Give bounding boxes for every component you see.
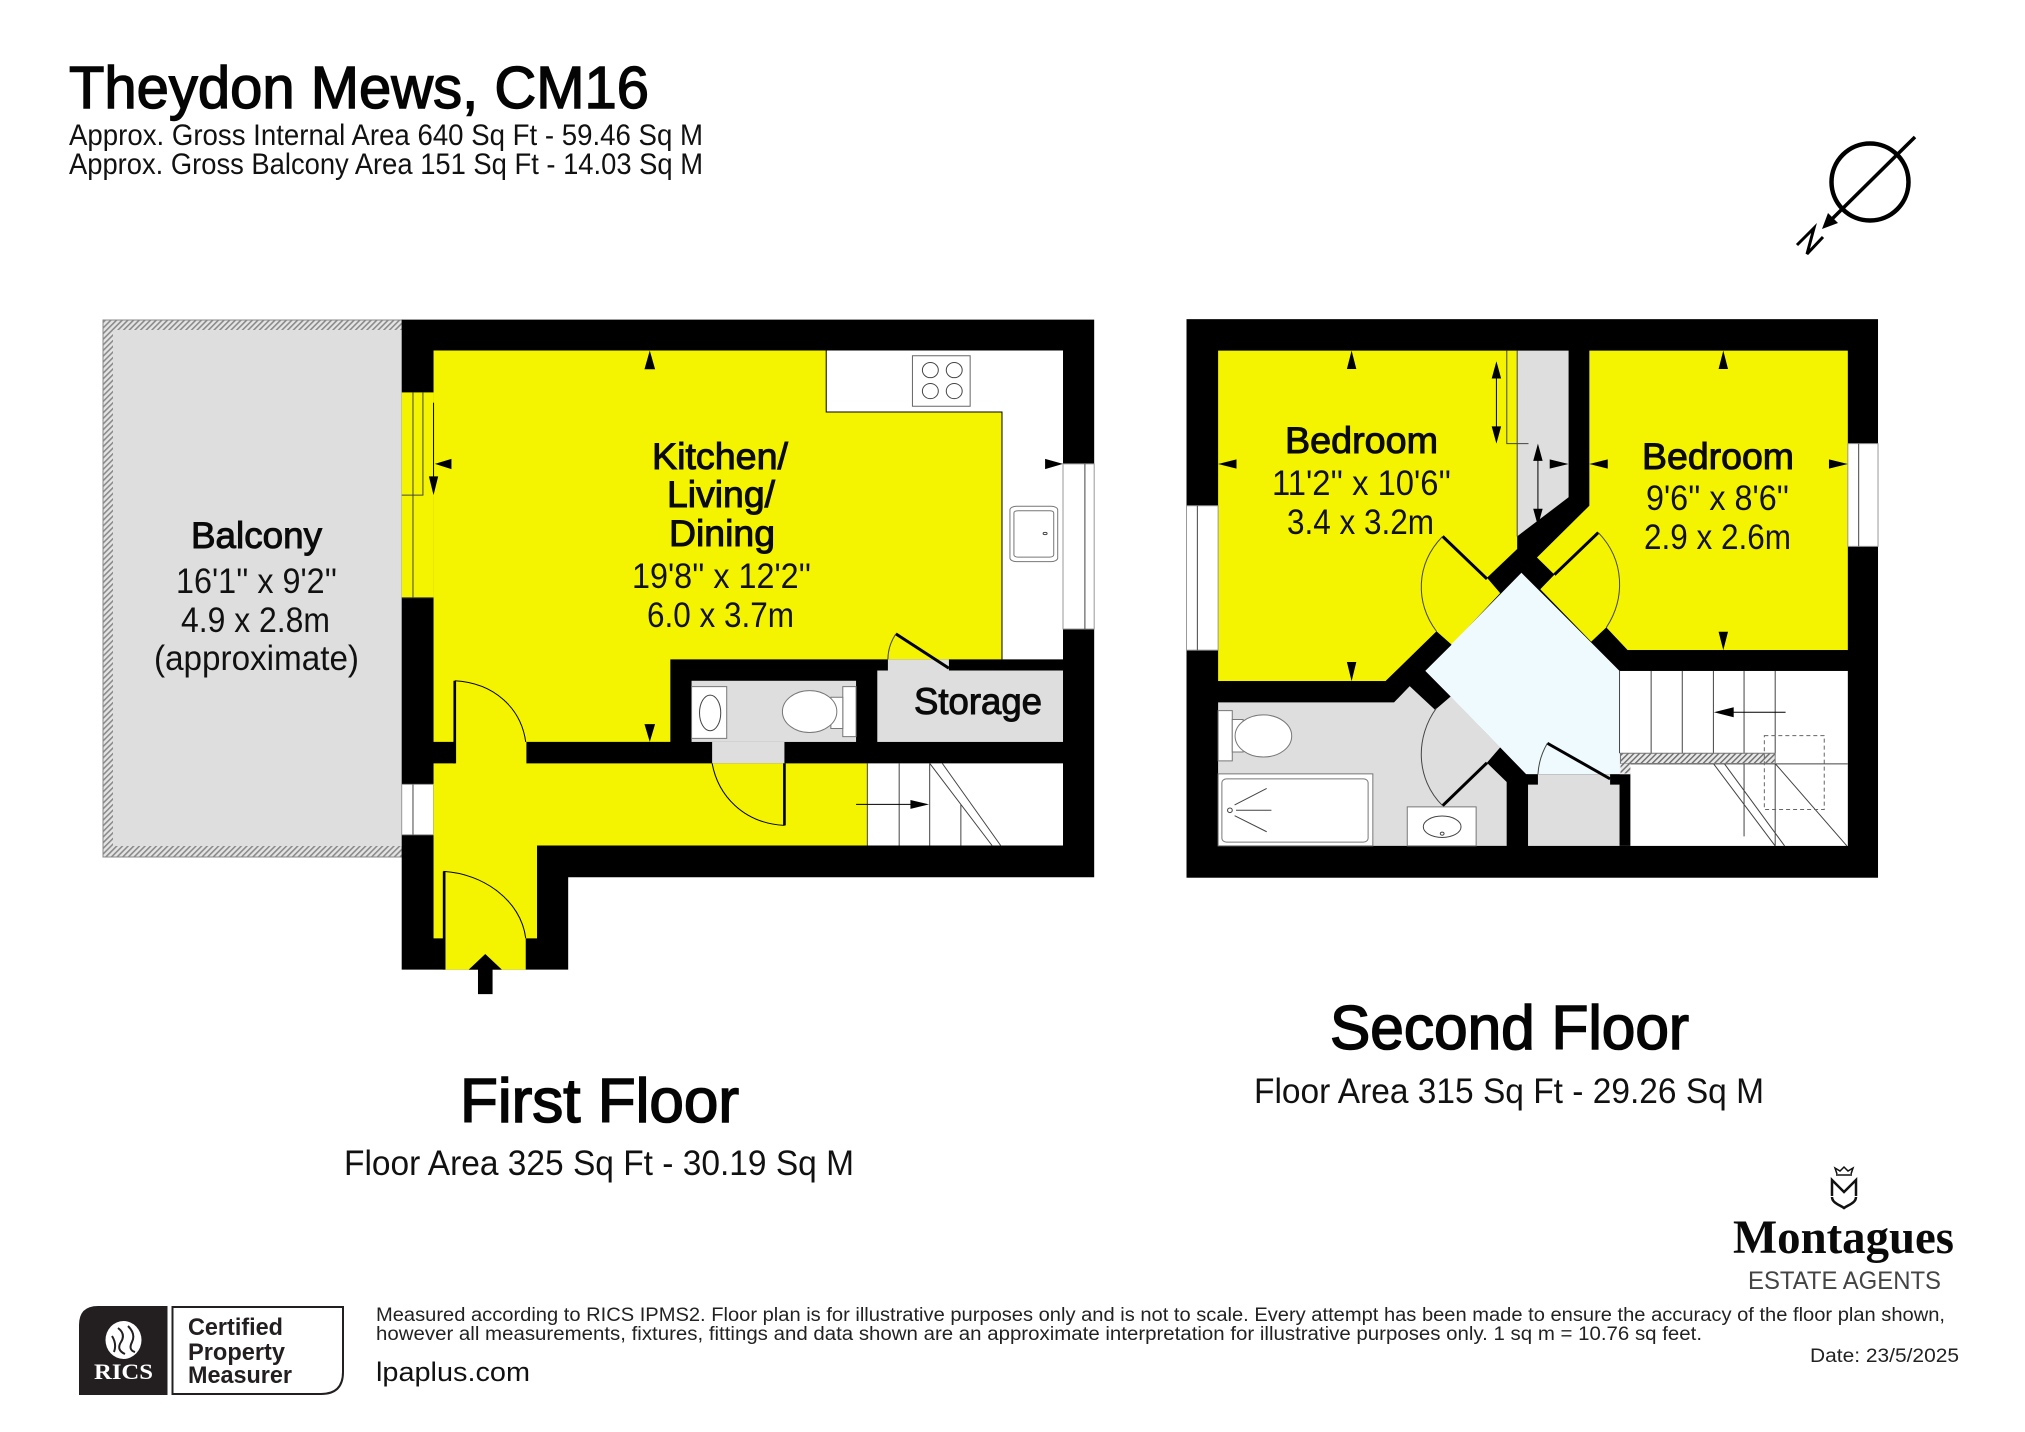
icon: Montagues crest bbox=[1832, 1167, 1856, 1208]
bedroom one label: Bedroom bbox=[1285, 420, 1438, 461]
stairs up bbox=[1620, 671, 1848, 846]
icon: entrance arrow bbox=[469, 954, 502, 994]
logo: Montagues estate agents: Montagues bbox=[1733, 1211, 1954, 1264]
bedroom one label: 11'2'' x 10'6'' bbox=[1272, 464, 1451, 503]
lower walls bbox=[1218, 628, 1848, 846]
internal area text: Approx. Gross Internal Area 640 Sq Ft - 59.46 Sq M bbox=[69, 119, 703, 152]
room dimension arrows bbox=[644, 350, 1063, 742]
second floor heading: Second Floor bbox=[1330, 994, 1689, 1063]
hallway bbox=[434, 763, 867, 970]
icon: kitchen sink bbox=[1010, 506, 1058, 562]
wardrobe bbox=[1517, 351, 1569, 536]
icon: north compass bbox=[1797, 137, 1915, 254]
kitchen label: 6.0 x 3.7m bbox=[647, 596, 794, 635]
first floor plan bbox=[103, 320, 1094, 994]
logo: Montagues estate agents bbox=[1733, 1167, 1954, 1295]
balcony sliding door bbox=[402, 392, 451, 598]
first floor heading bbox=[344, 1067, 854, 1183]
second floor plan bbox=[1187, 319, 1878, 878]
icon: wc basin bbox=[692, 687, 727, 738]
stairs down bbox=[856, 763, 1063, 846]
bathroom bbox=[1218, 686, 1507, 846]
balcony label: (approximate) bbox=[154, 639, 359, 678]
bedroom two label: 9'6'' x 8'6'' bbox=[1646, 479, 1789, 518]
kitchen label: Living/ bbox=[667, 474, 776, 515]
disclaimer text: however all measurements, fixtures, fittings and data shown are an approximate interpretation for illustrative purposes only. 1 sq m = 10.76 sq feet. bbox=[376, 1324, 1702, 1345]
bedroom one bbox=[1218, 351, 1517, 681]
logo: Montagues estate agents: ESTATE AGENTS bbox=[1748, 1267, 1941, 1295]
first floor heading: Floor Area 325 Sq Ft - 30.19 Sq M bbox=[344, 1144, 854, 1183]
second floor heading: Floor Area 315 Sq Ft - 29.26 Sq M bbox=[1254, 1072, 1764, 1111]
date: Date: 23/5/2025 bbox=[1810, 1346, 1959, 1367]
bathroom door bbox=[1421, 708, 1487, 806]
icon: bath with shower bbox=[1218, 774, 1373, 846]
kitchen living dining room bbox=[434, 350, 1002, 742]
second floor walls bbox=[1187, 319, 1878, 878]
landing bbox=[1425, 573, 1620, 774]
certification box: Property bbox=[188, 1339, 286, 1366]
storage cupboard bbox=[877, 659, 1063, 742]
bedroom one door bbox=[1421, 536, 1487, 631]
bedroom one label: 3.4 x 3.2m bbox=[1287, 503, 1434, 542]
balcony area text: Approx. Gross Balcony Area 151 Sq Ft - 14.03 Sq M bbox=[69, 148, 703, 181]
kitchen worktop bbox=[826, 350, 1063, 659]
storage door bbox=[888, 634, 949, 668]
storage label: Storage bbox=[914, 681, 1042, 722]
kitchen label: Kitchen/ bbox=[652, 436, 789, 477]
kitchen label bbox=[632, 436, 811, 635]
RICS certified badge bbox=[79, 1306, 343, 1395]
windows bbox=[1187, 444, 1878, 650]
second floor heading bbox=[1254, 994, 1764, 1111]
disclaimer text: Measured according to RICS IPMS2. Floor plan is for illustrative purposes only and is not to scale. Every attempt has been made to ensure the accuracy of the floor plan shown, bbox=[376, 1305, 1945, 1326]
landing cupboard door bbox=[1538, 743, 1610, 779]
balcony label: 4.9 x 2.8m bbox=[181, 601, 330, 640]
wc room bbox=[692, 681, 856, 763]
certification box: Certified bbox=[188, 1314, 283, 1341]
bedroom two bbox=[1537, 351, 1848, 650]
bedroom two door bbox=[1554, 533, 1620, 628]
icon: bathroom basin bbox=[1407, 807, 1476, 846]
bedroom one label bbox=[1272, 420, 1451, 542]
title block bbox=[69, 55, 703, 181]
certification box bbox=[172, 1307, 343, 1394]
balcony label bbox=[154, 515, 359, 678]
first floor heading: First Floor bbox=[460, 1067, 739, 1136]
disclaimer text bbox=[376, 1305, 1945, 1345]
kitchen label: Dining bbox=[669, 513, 775, 554]
kitchen label: 19'8'' x 12'2'' bbox=[632, 557, 811, 596]
bedroom two label: Bedroom bbox=[1642, 436, 1794, 477]
hall window bbox=[402, 784, 434, 835]
bedroom two label bbox=[1642, 436, 1794, 557]
entrance door bbox=[443, 871, 526, 970]
living room door bbox=[453, 681, 526, 764]
landing cupboard bbox=[1528, 774, 1620, 846]
balcony label: 16'1'' x 9'2'' bbox=[176, 562, 337, 601]
RICS black panel: RICS bbox=[94, 1359, 153, 1384]
icon: RICS lion bbox=[106, 1321, 142, 1359]
certification box: Measurer bbox=[188, 1362, 292, 1389]
title: Theydon Mews, CM16 bbox=[69, 55, 649, 121]
balcony label: Balcony bbox=[191, 515, 322, 556]
first floor walls bbox=[402, 320, 1094, 970]
room dimension arrows bbox=[1218, 351, 1848, 681]
icon: hob bbox=[912, 356, 970, 406]
wc door bbox=[712, 763, 786, 825]
icon: wc toilet bbox=[782, 687, 856, 737]
icon: toilet bbox=[1218, 711, 1292, 761]
website: lpaplus.com bbox=[376, 1357, 530, 1387]
RICS black panel bbox=[79, 1306, 168, 1395]
balcony bbox=[103, 320, 402, 857]
bedroom two label: 2.9 x 2.6m bbox=[1644, 518, 1791, 557]
wardrobe sliding door bbox=[1492, 351, 1569, 536]
kitchen window bbox=[1063, 464, 1094, 629]
